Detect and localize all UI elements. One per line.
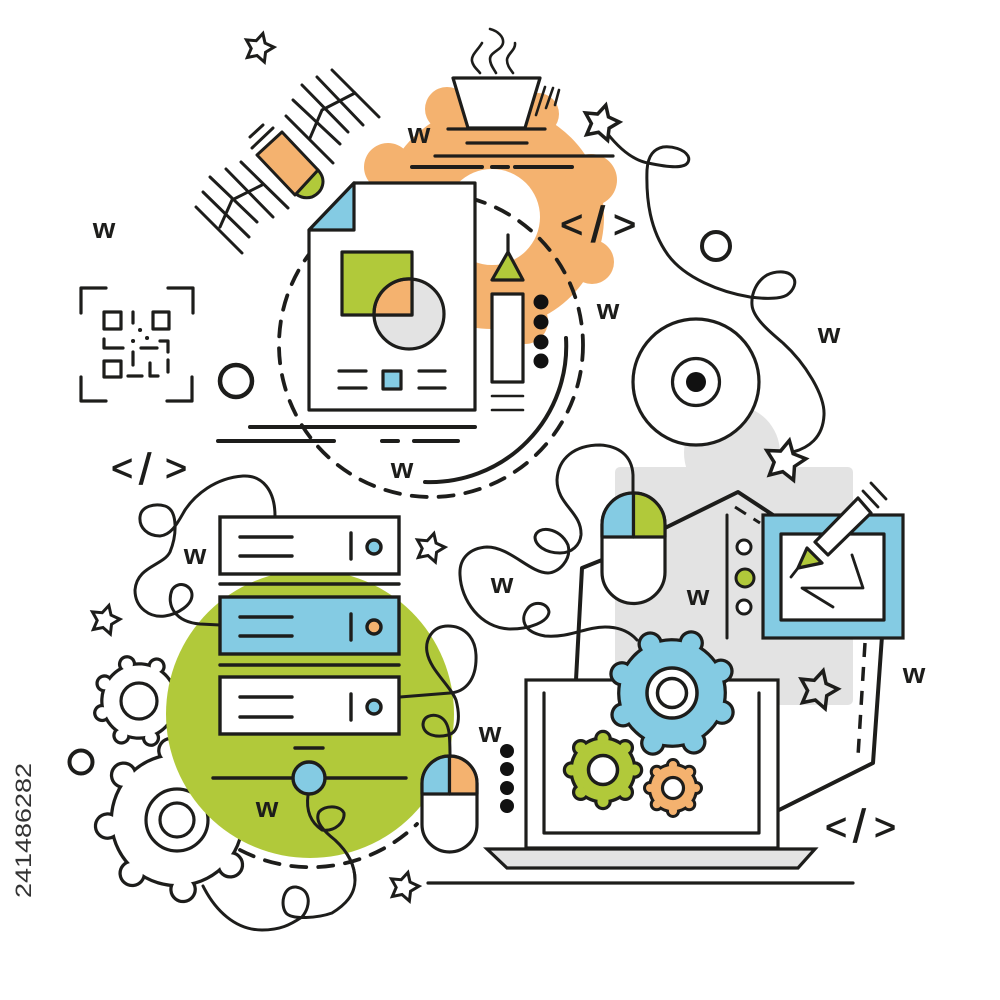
w labels: w	[902, 658, 926, 690]
code tag: top	[560, 197, 636, 253]
w labels: w	[478, 717, 502, 749]
w labels: w	[255, 792, 279, 824]
w labels: w	[92, 213, 116, 245]
dots by laptop	[500, 744, 514, 813]
icon: coffee cup	[412, 29, 613, 167]
gear: orange	[646, 761, 700, 815]
w labels: w	[390, 453, 414, 485]
icon: pencil	[492, 235, 523, 410]
server rack	[213, 517, 406, 794]
gear: blue	[591, 612, 753, 774]
circle: left	[220, 365, 252, 397]
curly wire: mouse to gear	[460, 445, 637, 640]
w labels: w	[596, 294, 620, 326]
code tag: left	[111, 445, 187, 494]
stars	[88, 30, 842, 902]
w labels: w	[183, 539, 207, 571]
icon: drawing tablet	[763, 483, 903, 638]
dots	[534, 294, 548, 368]
green circle backdrop	[166, 570, 454, 858]
w labels: w	[686, 580, 710, 612]
code tag: bottom right	[825, 800, 896, 852]
w labels: w	[817, 318, 841, 350]
w labels: w	[407, 118, 431, 150]
device outline	[576, 492, 882, 810]
solid arc	[425, 338, 566, 482]
code tag: left: <	[111, 448, 133, 490]
ground lines under document	[218, 427, 475, 441]
server one	[220, 517, 399, 574]
icon: QR code scanner	[81, 288, 193, 401]
code tag: bottom right: <	[825, 807, 847, 849]
w labels: w	[490, 568, 514, 600]
code tag: top: <	[560, 203, 583, 247]
circle: lower left	[70, 750, 92, 774]
curly wire: star to star	[607, 133, 824, 452]
code tag: bottom right: /	[853, 800, 866, 852]
grey backdrop shape	[615, 405, 853, 705]
circle: upper right	[702, 232, 730, 260]
curly wire: server one to server two	[135, 476, 275, 625]
curly wire over green circle	[308, 795, 355, 880]
icon: satellite	[196, 70, 379, 253]
code tag: top: /	[591, 197, 605, 253]
server three	[220, 677, 399, 734]
icon: computer mouse top	[602, 493, 665, 604]
w labels	[92, 118, 926, 824]
gear: left upper	[83, 645, 195, 757]
device details	[727, 507, 865, 756]
orange gear backdrop	[364, 87, 617, 344]
icon: disc	[633, 319, 759, 445]
stock number: 241486282	[11, 763, 36, 898]
code tag: left: /	[139, 445, 152, 494]
gear: green	[566, 733, 640, 807]
code tag: top: >	[613, 203, 636, 247]
code tag: bottom right: >	[874, 807, 896, 849]
document icon	[309, 183, 475, 410]
icon: laptop	[428, 680, 853, 883]
icon: computer mouse bottom	[422, 756, 477, 852]
curly wire: circle node to gear	[203, 840, 355, 930]
dashed ring around document	[279, 193, 583, 497]
server two	[220, 597, 399, 654]
curly wire: server three to mouse	[400, 626, 476, 757]
gear: left lower	[90, 733, 264, 907]
code tag: left: >	[165, 448, 187, 490]
dashed arc under green circle	[240, 824, 417, 867]
